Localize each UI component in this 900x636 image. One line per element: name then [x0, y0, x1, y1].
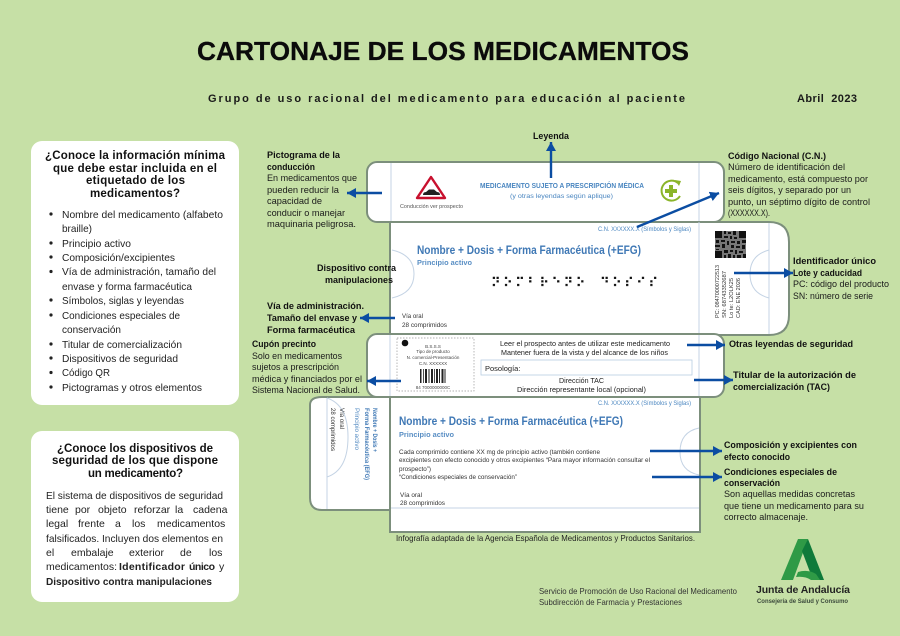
list: label contents: Símbolos, siglas y leyendas — [62, 295, 184, 307]
footer: service: Subdirección de Farmacia y Prestaciones — [539, 597, 682, 607]
label: cupon precinto: Cupón precinto — [252, 339, 316, 350]
heading: minimum information: medicamentos? — [90, 188, 180, 200]
label: codigo nacional: seis dígitos, y separado por un — [728, 185, 851, 196]
heading: minimum information: ¿Conoce la información mínima — [45, 150, 226, 162]
heading: minimum information — [45, 150, 226, 200]
label: dispositivo contra manipulaciones: manipulaciones — [325, 275, 393, 286]
list: label contents: braille) — [62, 223, 92, 235]
heading: minimum information: etiquetado de los — [86, 175, 185, 187]
flap: top legend: MEDICAMENTO SUJETO A PRESCRIPCIÓN MÉDICA — [480, 181, 644, 190]
box face: back: Principio activo — [399, 430, 454, 439]
coupon: B.S.S.S — [425, 344, 441, 349]
unique identifier codes: CAD: ENE 2026 — [736, 278, 742, 318]
braille text: ⠝⠕⠍⠃⠗⠑⠝⠕⠀⠙⠕⠎⠊⠎ — [491, 276, 658, 291]
label: pictograma: conducir o manejar — [267, 208, 345, 219]
flap: top legend: Conducción ver prospecto — [400, 204, 463, 210]
label: pictograma: Pictograma de la — [267, 150, 341, 161]
label: via de administracion: Vía de administración. — [267, 301, 364, 312]
box face: front: Nombre + Dosis + Forma Farmacéutica (+EFG) — [417, 245, 641, 257]
barcode — [420, 369, 446, 383]
text: safety devices description: objeto — [98, 504, 127, 516]
date: Abril 2023 — [797, 93, 857, 105]
label: via de administracion — [267, 301, 364, 336]
label: via de administracion: Tamaño del envase y — [267, 313, 358, 324]
text: safety devices description: de — [180, 547, 192, 559]
box face: back — [390, 397, 700, 532]
flap: top legend: (y otras leyendas según aplique) — [510, 193, 613, 200]
text: safety devices description: falsificados. Incluyen dos elementos en — [46, 533, 223, 545]
text: safety devices description: embalaje — [71, 547, 114, 559]
box face: back: 28 comprimidos — [400, 500, 446, 507]
label: pictograma: capacidad de — [267, 196, 322, 207]
QR code — [715, 231, 746, 258]
text: safety devices description: medicamentos: — [46, 561, 117, 573]
label: codigo nacional: Número de identificación del — [728, 162, 845, 173]
label: dispositivo contra manipulaciones — [317, 263, 397, 286]
flap: left side: Forma Farmacéutica (EFG) — [363, 408, 370, 480]
flap: top legend — [367, 162, 724, 222]
heading: safety devices: ¿Conoce los dispositivos de — [57, 443, 213, 455]
box face: back: excipientes con efecto conocido y otros excipientes “Para mayor información consultar el — [399, 457, 650, 464]
text: safety devices description: a — [115, 518, 121, 530]
arrow: titular — [694, 379, 733, 381]
label: pictograma — [267, 150, 357, 230]
flap: left side: Principio activo — [353, 408, 360, 450]
label: cupon precinto — [252, 339, 362, 396]
text: safety devices description: Identificador — [119, 561, 185, 573]
label: via de administracion: Forma farmacéutica — [267, 325, 356, 336]
coupon: Tipo de producto — [416, 349, 450, 354]
label: condiciones: que tiene un medicamento para su — [724, 501, 864, 512]
coupon: C.N. XXXXXX — [419, 361, 447, 366]
label: condiciones: conservación — [724, 478, 780, 489]
label: composicion: Composición y excipientes con — [724, 440, 857, 451]
unique identifier codes: Lo te: L2OLK25 — [729, 278, 735, 318]
text: safety devices description: cadena — [193, 504, 228, 516]
logo: Junta de Andalucía: Junta de Andalucía — [756, 584, 850, 596]
label: titular — [733, 370, 856, 393]
arrow: pictograma — [347, 192, 382, 194]
box face: back: Nombre + Dosis + Forma Farmacéutica (+EFG) — [399, 416, 623, 428]
unique identifier codes: PC: 08470000722513 — [715, 265, 721, 318]
arrow: leyenda — [550, 142, 552, 178]
label: composicion — [724, 440, 857, 463]
label: composicion: efecto conocido — [724, 452, 790, 463]
box face: front — [390, 222, 789, 335]
carton: packaging diagram — [310, 162, 789, 532]
text: safety devices description: Dispositivo contra manipulaciones — [46, 576, 212, 588]
label: codigo nacional — [728, 151, 870, 219]
label: identificador unico: Identificador único — [793, 256, 876, 267]
list: label contents: Pictogramas y otros elementos — [62, 382, 202, 394]
text: safety devices description: único — [189, 561, 215, 573]
label: identificador unico: Lote y caducidad — [793, 268, 862, 279]
box face: back: Cada comprimido contiene XX mg de principio activo (también contiene — [399, 449, 600, 456]
text: safety devices description: y — [219, 561, 225, 573]
unique identifier codes — [715, 265, 742, 318]
text: safety devices description: legal — [46, 518, 68, 530]
list: label contents: Composición/excipientes — [62, 252, 175, 264]
list: label contents: Código QR — [62, 367, 110, 379]
list: label contents: Nombre del medicamento (alfabeto — [62, 209, 223, 221]
coupon: 84 7000000000C — [416, 385, 451, 390]
box face: back: C.N. XXXXXX.X (Símbolos y Siglas) — [598, 401, 691, 407]
footer: service: Servicio de Promoción de Uso Racional del Medicamento — [539, 586, 737, 596]
box face: back: Vía oral — [400, 492, 423, 499]
label: identificador unico — [793, 256, 889, 302]
flap: middle safety legends: Dirección TAC — [559, 376, 605, 385]
label: condiciones: correcto almacenaje. — [724, 512, 808, 523]
arrow: otras leyendas — [687, 344, 725, 346]
label: pictograma: conducción — [267, 162, 315, 173]
flap: middle safety legends: Leer el prospecto antes de utilizar este medicamento — [500, 339, 670, 348]
text: safety devices description — [46, 490, 228, 588]
label: codigo nacional: medicamento, está compuesto por — [728, 174, 868, 185]
subtitle: Grupo de uso racional del medicamento para educación al paciente — [208, 93, 685, 105]
text: safety devices description: El sistema de dispositivos de seguridad — [46, 490, 223, 502]
flap: middle safety legends: Dirección representante local (opcional) — [517, 385, 646, 394]
label: dispositivo contra manipulaciones: Dispositivo contra — [317, 263, 397, 274]
label: condiciones: Condiciones especiales de — [724, 467, 837, 478]
label: codigo nacional: Código Nacional (C.N.) — [728, 151, 826, 162]
title: CARTONAJE DE LOS MEDICAMENTOS — [197, 36, 689, 66]
box face: back: prospecto”) — [399, 466, 431, 473]
label: cupon precinto: sujetos a prescripción — [252, 362, 339, 373]
label: identificador unico: SN: número de serie — [793, 291, 873, 302]
box face: front: Vía oral — [402, 313, 424, 320]
text: safety devices description: la — [175, 504, 183, 516]
label: pictograma: En medicamentos que — [267, 173, 357, 184]
flap: middle safety legends: Mantener fuera de la vista y del alcance de los niños — [501, 348, 668, 357]
icon: green cross symbol — [662, 180, 681, 201]
text: safety devices description: frente — [78, 518, 105, 530]
box face: back: “Condiciones especiales de conservación” — [399, 474, 517, 481]
text: safety devices description: medicamentos — [157, 518, 225, 530]
text: safety devices description: tiene — [46, 504, 69, 516]
box face: front: C.N. XXXXXX.X (Símbolos y Siglas) — [598, 227, 691, 233]
text: safety devices description: el — [46, 547, 54, 559]
logo: Junta de Andalucía: Consejería de Salud y Consumo — [757, 598, 848, 605]
attribution: Infografía adaptada de la Agencia Española de Medicamentos y Productos Sanitarios. — [396, 533, 695, 543]
text: safety devices description: por — [75, 504, 91, 516]
flap: middle safety legends: Posología: — [485, 364, 520, 373]
box face: front: 28 comprimidos — [402, 322, 448, 329]
panel: minimum information — [31, 141, 239, 405]
label: cupon precinto: médica y financiados por el — [252, 374, 362, 385]
label: pictograma: pueden reducir la — [267, 185, 340, 196]
coupon: N. comercial-Presentación — [407, 355, 460, 360]
coupon — [397, 338, 474, 391]
flap: left side — [310, 397, 390, 510]
arrow: identificador — [734, 272, 793, 274]
label: otras leyendas: Otras leyendas de seguridad — [729, 339, 853, 350]
label: identificador unico: PC: código del producto — [793, 279, 889, 290]
arrow: codigo nacional — [637, 193, 719, 227]
text: safety devices description: reforzar — [134, 504, 171, 516]
footer: service — [539, 586, 737, 607]
list: label contents: Condiciones especiales de — [62, 310, 180, 322]
label: cupon precinto: Sistema Nacional de Salud. — [252, 385, 360, 396]
arrow: cupon — [367, 380, 401, 382]
text: safety devices description: los — [132, 518, 145, 530]
list: label contents: Principio activo — [62, 238, 131, 250]
flap: left side: Vía oral — [338, 408, 345, 430]
label: condiciones: Son aquellas medidas concretas — [724, 489, 855, 500]
list: label contents: Dispositivos de seguridad — [62, 353, 178, 365]
heading: safety devices: seguridad de los que dispone — [52, 455, 218, 467]
arrow: condiciones — [652, 476, 722, 478]
box face: front: Principio activo — [417, 258, 472, 267]
text: safety devices description: exterior — [129, 547, 165, 559]
text: safety devices description: los — [209, 547, 222, 559]
label: leyenda: Leyenda — [533, 131, 570, 142]
label: pictograma: maquinaria peligrosa. — [267, 219, 356, 230]
flap: middle safety legends — [367, 334, 724, 397]
list: label contents: Vía de administración, tamaño del — [62, 266, 216, 278]
arrow: composicion — [650, 450, 722, 452]
icon: driving warning triangle — [417, 177, 445, 198]
flap: left side: Nombre + Dosis + — [371, 408, 378, 452]
list: label contents: Titular de comercialización — [62, 339, 182, 351]
flap: left side: 28 comprimidos — [329, 408, 336, 452]
heading: safety devices — [52, 443, 218, 480]
list: label contents — [49, 209, 223, 394]
label: codigo nacional: (XXXXXX.X). — [728, 208, 770, 219]
label: titular: Titular de la autorización de — [733, 370, 856, 381]
label: titular: comercialización (TAC) — [733, 382, 830, 393]
list: label contents: envase y forma farmacéutica — [62, 281, 192, 293]
list: label contents: conservación — [62, 324, 121, 336]
heading: minimum information: que debe estar incluida en el — [53, 163, 217, 175]
logo: Junta de Andalucía — [756, 539, 850, 605]
panel: safety devices — [31, 431, 239, 602]
label: cupon precinto: Solo en medicamentos — [252, 351, 342, 362]
label: condiciones — [724, 467, 864, 523]
heading: safety devices: un medicamento? — [88, 468, 183, 480]
arrow: via de administracion — [360, 317, 395, 319]
unique identifier codes: SN: 68743352687 — [722, 271, 728, 318]
label: codigo nacional: punto, un séptimo dígito de control — [728, 197, 870, 208]
